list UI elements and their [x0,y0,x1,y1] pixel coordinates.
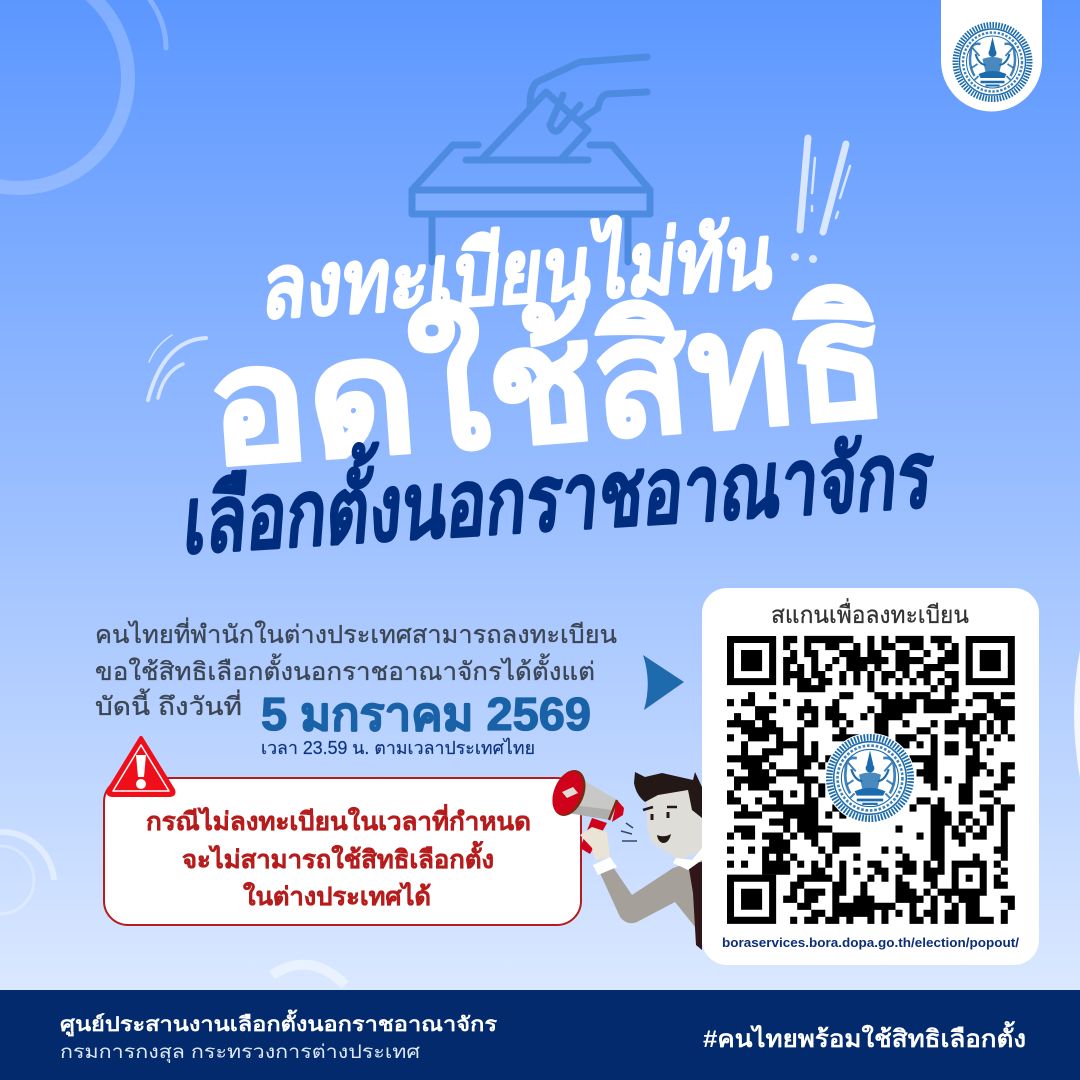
cuff [593,857,617,875]
hashtag: #คนไทยพร้อมใช้สิทธิเลือกตั้ง [703,1020,1026,1053]
body text: ขอใช้สิทธิเลือกตั้งนอกราชอาณาจักรได้ตั้งแต่ [95,653,595,686]
suit arm and torso [600,858,702,933]
icon: QR centre seal [825,733,915,823]
footer [0,990,1080,1080]
icon: seal [956,25,1030,99]
callout: warning [104,738,581,925]
eyes and brows [643,807,677,810]
collar [673,848,702,870]
seal tab [941,0,1042,112]
mouth [657,834,671,843]
hair [634,772,702,818]
title line 2: อด [202,304,422,499]
decorative swirl [148,335,206,400]
tie [688,862,702,950]
footer organisation name: ศูนย์ประสานงานเลือกตั้งนอกราชอาณาจักร [60,1009,497,1038]
panel: QR [702,588,1039,965]
character with megaphone [546,765,702,950]
hand [580,827,610,860]
callout text: กรณีไม่ลงทะเบียนในเวลาที่กำหนด [146,804,531,836]
date: 5 มกราคม 2569 [261,688,591,740]
decorative exclamation marks [795,138,850,259]
body text: บัดนี้ ถึงวันที่ [95,688,242,721]
arrow [643,655,684,710]
title line 2 [202,266,893,499]
callout text: จะไม่สามารถใช้สิทธิเลือกตั้ง [182,840,494,874]
face and neck [647,786,702,863]
QR heading: สแกนเพื่อลงทะเบียน [771,598,969,629]
callout text [146,804,531,911]
QR code [727,640,1015,920]
callout text: ในต่างประเทศได้ [243,881,431,911]
sound lines [621,823,637,841]
body text [95,617,617,721]
title line 2: ใช้สิทธิ [404,266,893,486]
handle [580,818,607,854]
QR URL: boraservices.bora.dopa.go.th/election/popout/ [722,935,1019,950]
icon: warning triangle [108,738,174,795]
footer department: กรมการกงสุล กระทรวงการต่างประเทศ [60,1042,420,1064]
icon: ballot box [412,57,650,262]
time note: เวลา 23.59 น. ตามเวลาประเทศไทย [261,737,535,758]
megaphone [568,780,617,820]
body text: คนไทยที่พำนักในต่างประเทศสามารถลงทะเบียน [95,617,617,649]
title line 1: ลงทะเบียนไม่ทัน [258,206,779,337]
